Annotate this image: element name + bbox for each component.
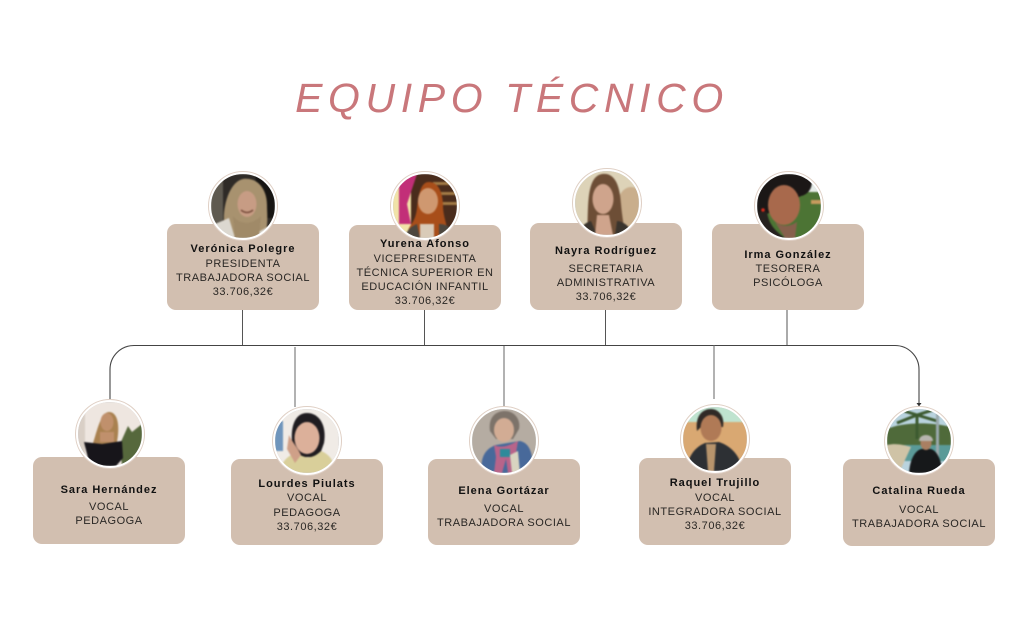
title: EQUIPO TÉCNICO xyxy=(295,75,729,121)
member card: Sara Hernández xyxy=(33,399,185,544)
member card: Elena Gortázar: TRABAJADORA SOCIAL xyxy=(437,517,571,529)
member card: Raquel Trujillo xyxy=(639,404,791,545)
card background xyxy=(530,223,682,310)
photo: Raquel xyxy=(681,405,749,473)
member card: Yurena Afonso: TÉCNICA SUPERIOR EN xyxy=(356,267,493,279)
name: Verónica Polegre xyxy=(191,243,295,255)
photo: Sara xyxy=(76,400,144,468)
member card: Irma González xyxy=(712,171,864,310)
card background xyxy=(167,224,319,310)
member card: Lourdes Piulats: 33.706,32€ xyxy=(277,521,337,533)
member card: Catalina Rueda: TRABAJADORA SOCIAL xyxy=(852,518,986,530)
member card: Nayra Rodríguez: ADMINISTRATIVA xyxy=(557,277,655,289)
role lines: PRESIDENTA xyxy=(206,258,280,270)
member card: Sara Hernández: PEDAGOGA xyxy=(75,515,143,527)
card background xyxy=(712,224,864,310)
photo: Verónica xyxy=(209,172,277,240)
member card: Lourdes Piulats: PEDAGOGA xyxy=(273,507,341,519)
member card: Nayra Rodríguez: 33.706,32€ xyxy=(576,291,636,303)
card background xyxy=(349,225,501,310)
member card: Raquel Trujillo: 33.706,32€ xyxy=(685,520,745,532)
card background xyxy=(231,459,383,545)
member card: Nayra Rodríguez xyxy=(530,168,682,310)
member card: Verónica Polegre xyxy=(167,171,319,310)
photo: Elena xyxy=(470,407,538,475)
name: Lourdes Piulats xyxy=(258,478,356,490)
role lines: VOCAL xyxy=(695,492,735,504)
card background xyxy=(639,458,791,545)
name: Irma González xyxy=(744,249,832,261)
card background xyxy=(843,459,995,546)
member card: Lourdes Piulats xyxy=(231,406,383,545)
photo: Catalina xyxy=(885,407,953,475)
photo: Yurena xyxy=(391,172,459,240)
role lines: VOCAL xyxy=(89,501,129,513)
photo: Irma xyxy=(755,172,823,240)
photo: Lourdes xyxy=(273,407,341,475)
role lines: SECRETARIA xyxy=(568,263,643,275)
member card: Yurena Afonso xyxy=(349,171,501,310)
member card: Catalina Rueda xyxy=(843,406,995,546)
member card: Irma González: PSICÓLOGA xyxy=(753,277,823,289)
member card: Yurena Afonso: EDUCACIÓN INFANTIL xyxy=(361,281,489,293)
name: Sara Hernández xyxy=(61,484,157,496)
member card: Elena Gortázar xyxy=(428,406,580,545)
role lines: VOCAL xyxy=(899,504,939,516)
name: Raquel Trujillo xyxy=(670,477,760,489)
role lines: VOCAL xyxy=(287,492,327,504)
member card: Verónica Polegre: TRABAJADORA SOCIAL xyxy=(176,272,310,284)
role lines: VOCAL xyxy=(484,503,524,515)
role lines: VICEPRESIDENTA xyxy=(374,253,476,265)
name: Yurena Afonso xyxy=(380,238,470,250)
name: Catalina Rueda xyxy=(872,485,966,497)
card background xyxy=(33,457,185,544)
member card: Verónica Polegre: 33.706,32€ xyxy=(213,286,273,298)
photo: Nayra xyxy=(573,169,641,237)
card background xyxy=(428,459,580,545)
member card: Yurena Afonso: 33.706,32€ xyxy=(395,295,455,307)
member card: Raquel Trujillo: INTEGRADORA SOCIAL xyxy=(648,506,782,518)
name: Nayra Rodríguez xyxy=(555,245,657,257)
role lines: TESORERA xyxy=(756,263,820,275)
name: Elena Gortázar xyxy=(458,485,550,497)
